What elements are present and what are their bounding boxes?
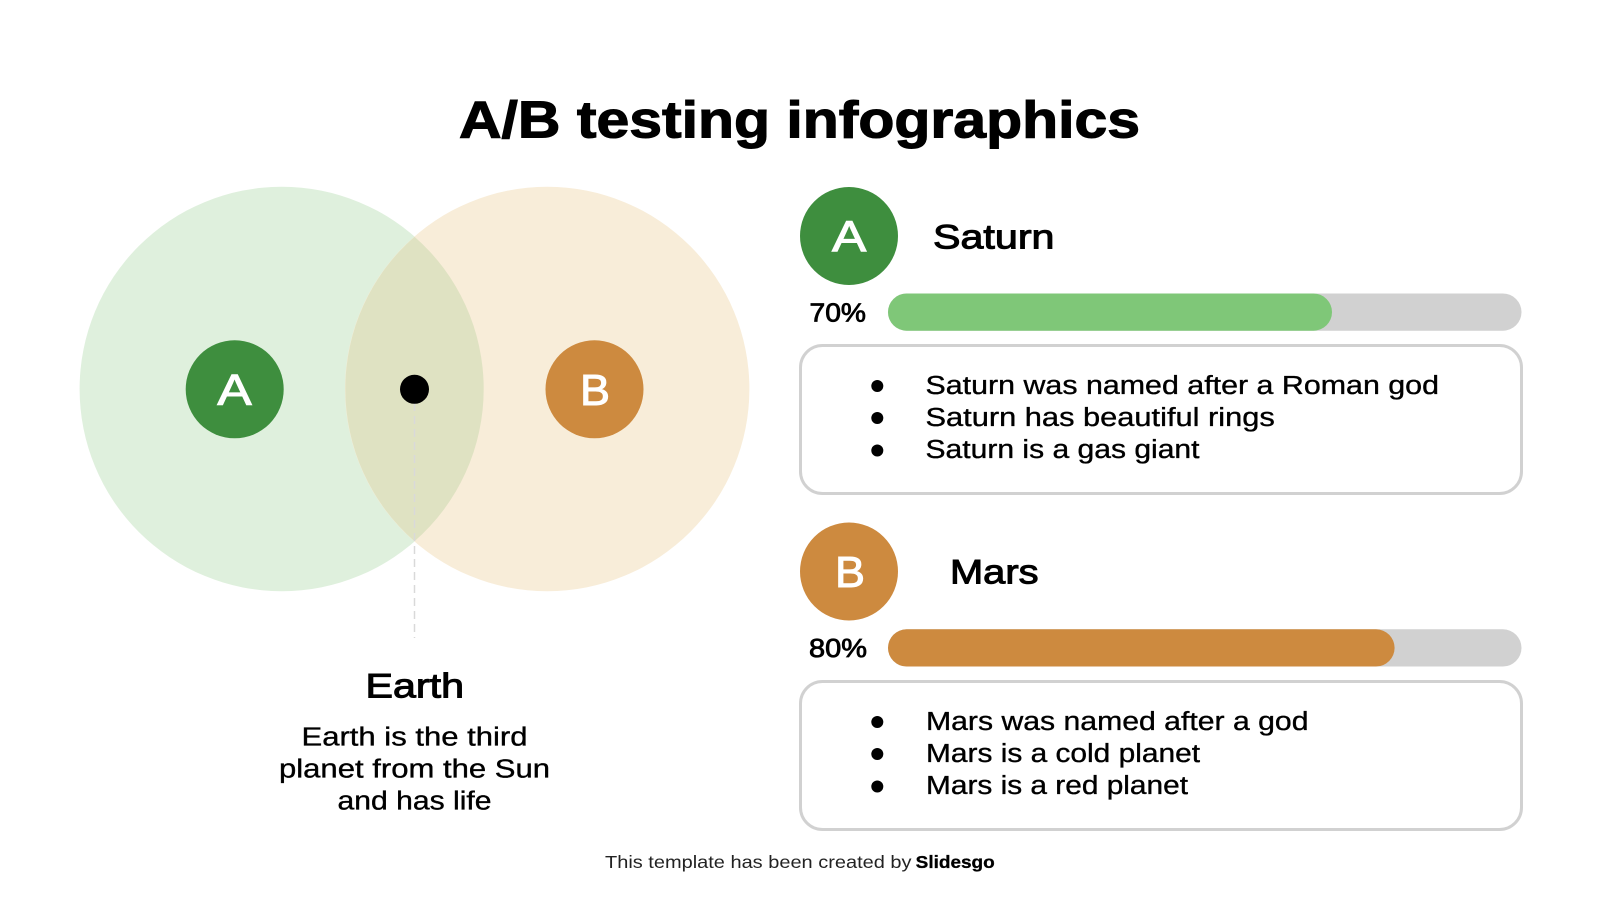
progress bar: 70% — [888, 294, 1522, 331]
center dot — [400, 375, 429, 404]
bullet list box: Saturn — [800, 346, 1522, 494]
title: A/B testing infographics — [459, 92, 1140, 150]
heading: Mars: Mars — [950, 554, 1038, 592]
badge: B — [800, 522, 898, 620]
panel: Mars (B) — [800, 522, 1522, 830]
badge: A — [186, 340, 284, 438]
badge: A — [800, 187, 898, 285]
badge: B: B — [835, 549, 865, 597]
footer credit — [605, 852, 995, 872]
footer credit: This template has been created by — [605, 852, 912, 872]
percentage: 80%: 80% — [809, 633, 867, 663]
badge: A: A — [217, 367, 252, 415]
bullet list box: Saturn: Saturn was named after a Roman god — [926, 372, 1439, 400]
dashed leader line — [414, 403, 416, 638]
description: Earth: Earth is the third — [302, 723, 528, 751]
bullet list box: Mars: Mars is a cold planet — [926, 740, 1200, 768]
percentage: 70%: 70% — [810, 298, 866, 328]
text block: Earth — [279, 668, 550, 816]
progress bar: 80% — [888, 629, 1522, 666]
bullet list box: Saturn: Saturn is a gas giant — [926, 436, 1200, 464]
heading: Earth: Earth — [366, 668, 464, 706]
venn diagram — [80, 187, 749, 638]
description: Earth — [279, 723, 550, 816]
bullet list box: Mars — [800, 682, 1522, 830]
bullet list box: Mars: Mars is a red planet — [926, 772, 1188, 800]
description: Earth: planet from the Sun — [279, 756, 550, 784]
badge: B — [546, 340, 644, 438]
panel: Saturn (A) — [800, 187, 1522, 494]
badge: A: A — [832, 214, 866, 262]
footer credit: Slidesgo — [916, 852, 995, 872]
heading: Saturn: Saturn — [933, 218, 1054, 256]
badge: B: B — [580, 367, 610, 415]
circle: B background — [345, 187, 749, 591]
circle: A background — [80, 187, 484, 591]
bullet list box: Saturn: Saturn has beautiful rings — [926, 404, 1275, 432]
bullet list box: Mars: Mars was named after a god — [926, 708, 1308, 736]
overlap region — [345, 237, 484, 541]
description: Earth: and has life — [338, 788, 492, 816]
